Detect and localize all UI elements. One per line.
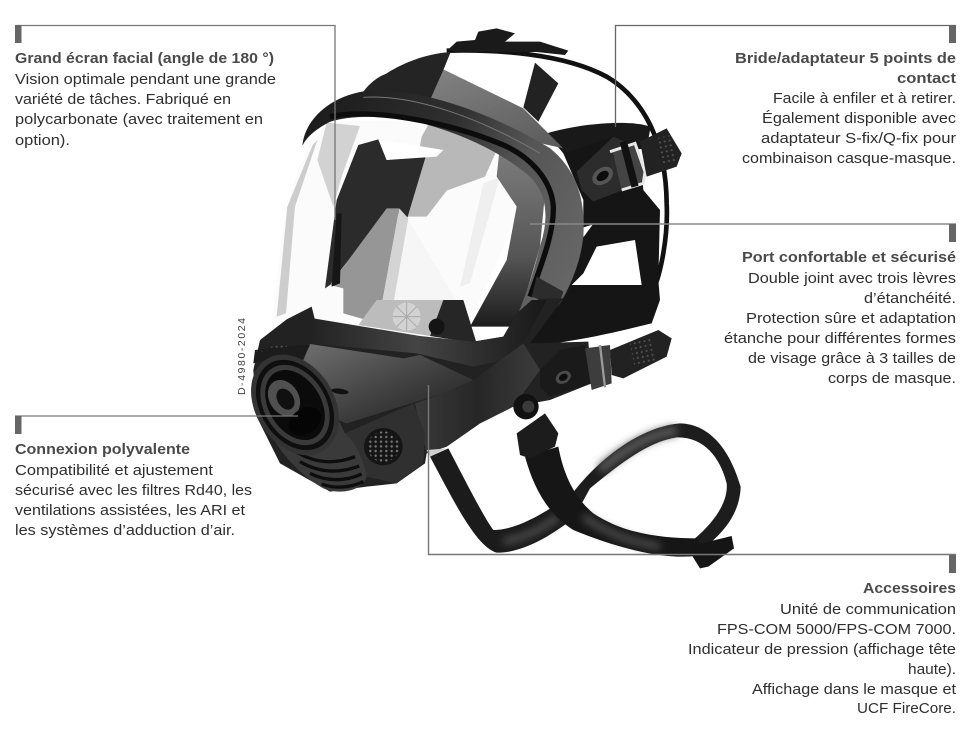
text block: bride/adaptateur: combinaison casque-masque. [742,151,956,167]
text block: grand écran facial: variété de tâches. Fabriqué en [15,92,231,108]
upper buckle [577,128,682,202]
text block: port confortable: Port confortable et sécurisé [742,250,956,266]
text block: accessoires: UCF FireCore. [857,701,956,717]
exhalation mesh [364,428,403,465]
text block: connexion polyvalente: ventilations assistées, les ARI et [15,503,245,519]
leader line: connexion [15,415,298,417]
face frame [303,52,584,327]
leader line: grand écran facial [15,26,335,220]
text block: bride/adaptateur: contact [897,71,956,87]
neck straps [430,413,741,568]
text block: bride/adaptateur: Également disponible avec [762,110,956,127]
text block: port confortable [724,250,956,387]
text block: connexion polyvalente [15,442,252,539]
text block: grand écran facial [15,51,276,149]
lens and interior [273,120,517,323]
text block: connexion polyvalente: sécurisé avec les filtres Rd40, les [15,483,252,499]
document code: D-4980-2024 [236,318,248,395]
text block: bride/adaptateur: Bride/adaptateur 5 points de [735,51,956,67]
filter connector [233,338,357,472]
text block: bride/adaptateur: adaptateur S-fix/Q-fix pour [761,131,956,147]
text block: bride/adaptateur [735,51,956,167]
illustration: full face mask [233,28,741,568]
text block: grand écran facial: option). [15,133,70,149]
leader line: port confortable [530,223,956,225]
text block: port confortable: de visage grâce à 3 tailles de [748,351,956,367]
text block: port confortable: corps de masque. [828,371,956,387]
leader line: accessoires [428,385,956,554]
text block: port confortable: d’étanchéité. [864,291,956,307]
lower buckle [540,330,672,397]
text block: port confortable: étanche pour différentes formes [724,331,956,347]
text block: accessoires: Accessoires [863,581,956,597]
text block: accessoires: FPS-COM 5000/FPS-COM 7000. [717,622,956,638]
text block: port confortable: Double joint avec trois lèvres [748,271,956,287]
text block: connexion polyvalente: Connexion polyvalente [15,442,190,458]
text block: grand écran facial: polycarbonate (avec traitement en [15,112,263,128]
text block: accessoires [688,581,956,717]
text block: accessoires: haute). [908,662,956,678]
text block: port confortable: Protection sûre et adaptation [746,311,956,327]
text block: accessoires: Indicateur de pression (affichage tête [688,642,956,658]
text block: accessoires: Affichage dans le masque et [752,682,956,698]
head harness [447,28,667,347]
lower interior [358,300,477,343]
text block: connexion polyvalente: les systèmes d’adduction d’air. [15,523,235,539]
text block: connexion polyvalente: Compatibilité et ajustement [15,463,213,479]
text block: grand écran facial: Vision optimale pendant une grande [15,72,276,88]
marker bars [15,25,956,573]
text block: grand écran facial: Grand écran facial (angle de 180 °) [15,51,274,67]
text block: bride/adaptateur: Facile à enfiler et à retirer. [773,91,956,107]
lower body [233,298,672,492]
leader line: bride [616,26,956,127]
text block: accessoires: Unité de communication [780,602,956,618]
